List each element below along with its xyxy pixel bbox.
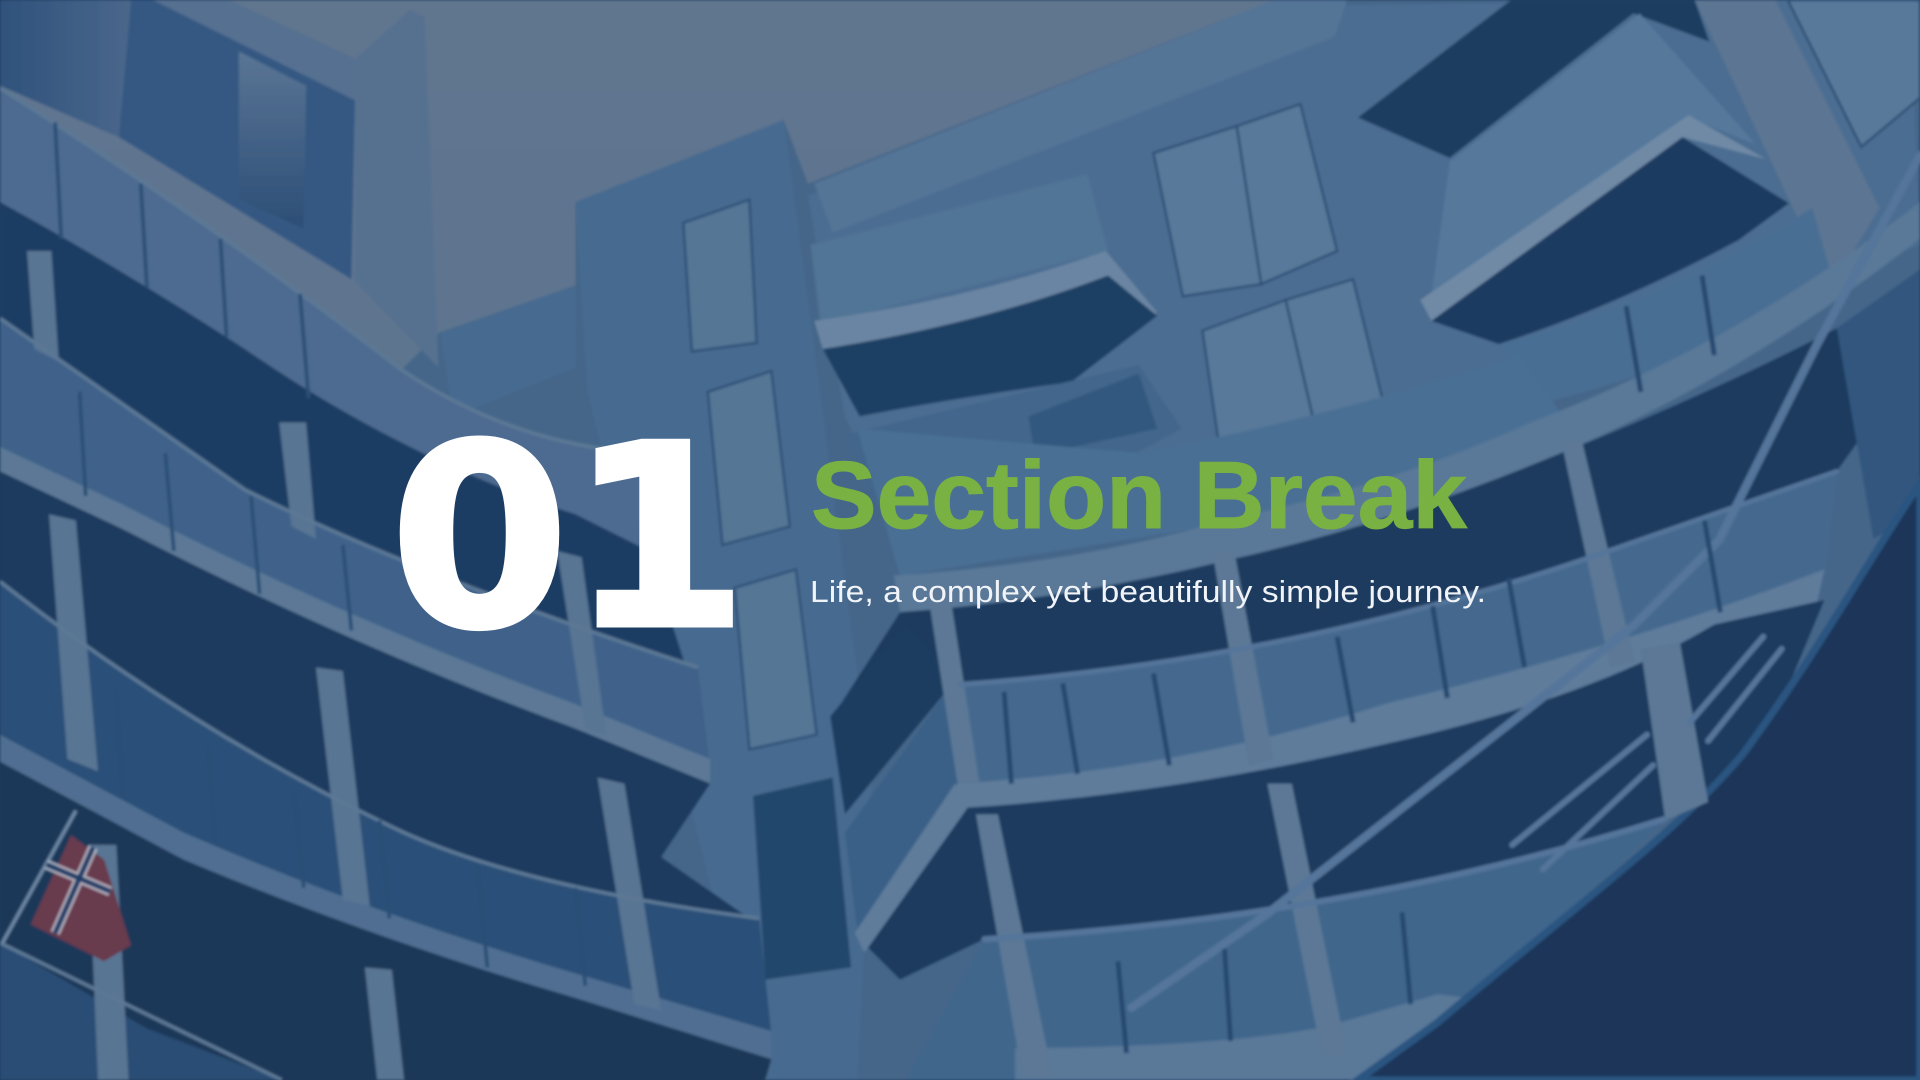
mid glass band xyxy=(960,471,1837,781)
right balustrade posts xyxy=(1004,276,1720,1053)
left rails xyxy=(0,88,759,1080)
corner balcony glass xyxy=(845,688,958,931)
dark tower window xyxy=(753,778,851,980)
mid right glass xyxy=(1499,208,1837,404)
dark under upper slab xyxy=(833,328,1867,716)
left building: light tower xyxy=(355,10,438,367)
centre balcony slab xyxy=(814,251,1157,349)
left building: window pane xyxy=(239,51,306,229)
left bottom balcony xyxy=(0,943,282,1080)
left balcony 1 glass xyxy=(0,88,649,551)
left balcony 3 slab xyxy=(0,735,771,1059)
central tower panel xyxy=(441,120,872,1080)
subtitle: Life, a complex yet beautifully simple journey. xyxy=(810,574,1486,609)
left balcony 2 underside xyxy=(0,471,749,918)
right columns xyxy=(927,441,1708,1078)
left balustrade posts xyxy=(55,122,585,986)
corner balcony dark wedge xyxy=(830,624,960,814)
left building: fascia xyxy=(153,0,355,100)
right rails xyxy=(960,156,1920,1008)
second centre balcony xyxy=(845,365,1182,514)
top right balcony slab xyxy=(1420,115,1766,321)
top right balcony glass xyxy=(1431,13,1756,296)
upper big slab over text xyxy=(894,202,1920,612)
tower windows xyxy=(683,200,817,749)
lower glass band xyxy=(906,819,1664,1080)
centre balcony underside xyxy=(823,276,1157,416)
top balcony rail xyxy=(814,0,1347,233)
left balcony 1 underside xyxy=(0,202,692,686)
corner slab xyxy=(855,784,967,953)
facade windows xyxy=(1153,0,1920,441)
centre balcony glass xyxy=(811,174,1108,324)
left balcony 2 glass xyxy=(0,318,710,769)
glass band above upper slab xyxy=(857,355,1567,576)
left building: window box xyxy=(0,0,131,137)
lower slab xyxy=(1015,994,1469,1080)
left building: shutter xyxy=(119,0,355,279)
mid slab xyxy=(953,569,1824,808)
upper right facade xyxy=(808,0,1920,539)
right column xyxy=(1695,0,1880,288)
top right balcony underside 2 xyxy=(1431,137,1789,344)
dark corner mass xyxy=(1358,484,1920,1080)
top right balcony underside xyxy=(1358,0,1709,158)
left bottom underside xyxy=(0,762,771,1080)
left balcony 3 glass xyxy=(0,582,771,1035)
flag xyxy=(2,811,131,961)
far right panel xyxy=(1837,269,1920,539)
left balcony 2 slab xyxy=(0,447,710,784)
dark under mid slab xyxy=(863,600,1824,980)
section number: 01 xyxy=(390,392,748,685)
heading: Section Break xyxy=(811,442,1468,549)
left columns xyxy=(27,251,661,1080)
